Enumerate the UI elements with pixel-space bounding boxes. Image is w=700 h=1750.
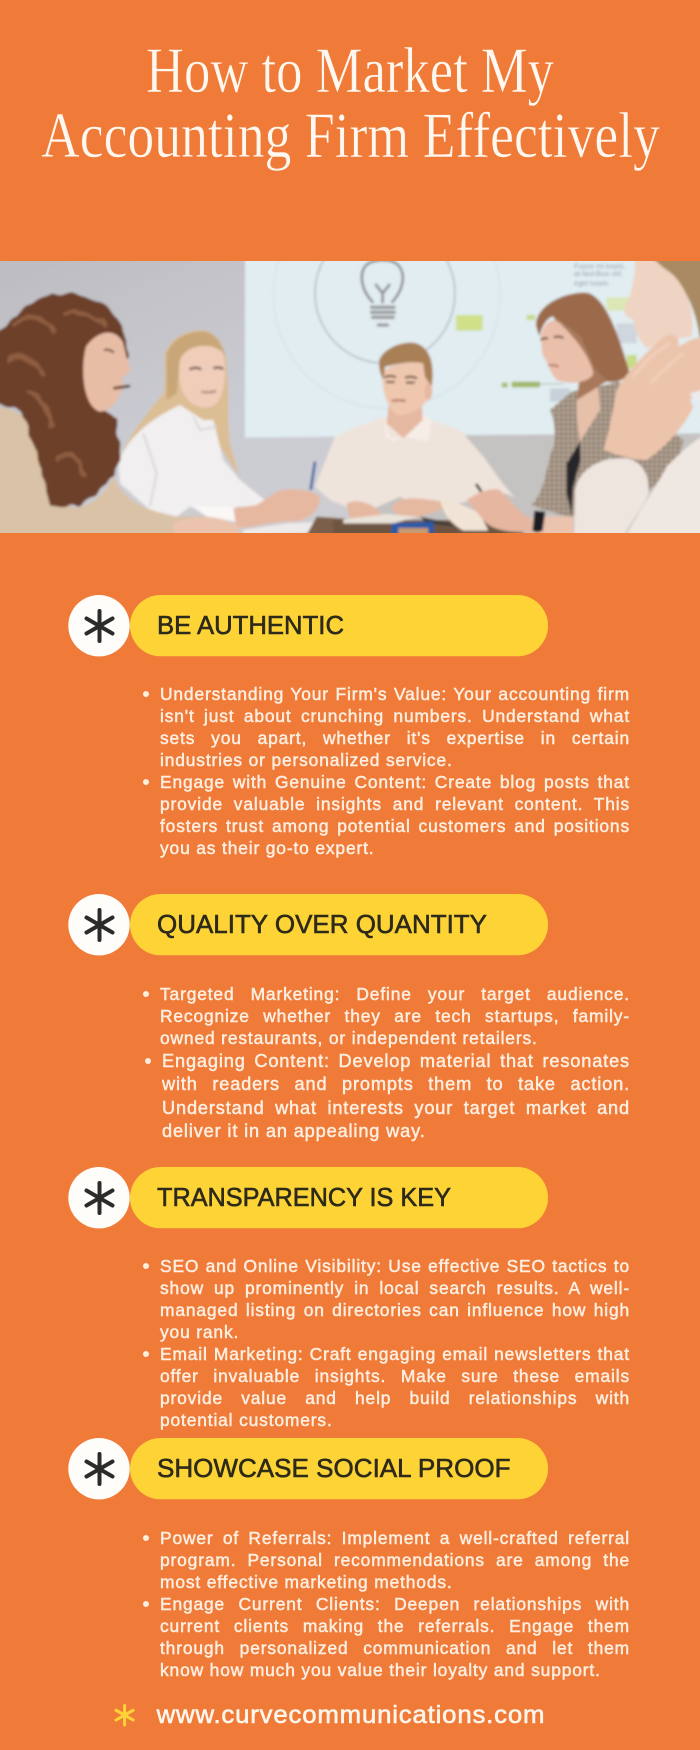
text block: bullets — [143, 1256, 630, 1430]
website url: www.curvecommunications.com — [156, 1701, 545, 1729]
text block: bullets: current clients making the referrals. Engage them — [160, 1616, 630, 1636]
text block: bullets: sets you apart, whether it's expertise in certain — [160, 728, 630, 748]
heading pill — [130, 1438, 548, 1500]
text block: bullets: most effective marketing methods. — [160, 1572, 453, 1592]
text block: second bullet, slightly larger: deliver it in an appealing way. — [162, 1121, 426, 1141]
photo: team meeting around a table in front of a projector screen — [0, 261, 700, 533]
text block: bullets: fosters trust among potential customers and positions — [160, 816, 630, 836]
text block: bullets: potential customers. — [160, 1410, 333, 1430]
text block: bullets: you as their go-to expert. — [160, 838, 374, 858]
text block: bullets: Engage Current Clients: Deepen relationships with — [160, 1594, 630, 1614]
text block: bullets: provide valuable insights and relevant content. This — [160, 794, 630, 814]
heading pill — [130, 1167, 548, 1228]
text block: second bullet, slightly larger: Engaging Content: Develop material that resonates — [162, 1051, 630, 1071]
text block: bullets: offer invaluable insights. Make sure these emails — [160, 1366, 630, 1386]
heading pill — [130, 595, 548, 656]
title — [41, 35, 660, 172]
icon: white circle with asterisk — [68, 595, 130, 656]
text block: bullets: Power of Referrals: Implement a well-crafted referral — [160, 1528, 630, 1548]
text block: bullets: managed listing on directories can influence how high — [160, 1300, 630, 1320]
text block: bullets: owned restaurants, or independent retailers. — [160, 1028, 538, 1048]
text block: bullets: you rank. — [160, 1322, 239, 1342]
panel: be authentic — [68, 595, 630, 858]
text block: bullets — [143, 684, 630, 858]
icon: white circle with asterisk — [68, 1167, 130, 1228]
text block: bullets: Understanding Your Firm's Value: Your accounting firm — [160, 684, 630, 704]
text block: bullets: provide value and help build relationships with — [160, 1388, 630, 1408]
icon: white circle with asterisk — [68, 1438, 130, 1500]
footer: website link with yellow asterisk — [114, 1701, 545, 1729]
photo: team meeting around a table in front of a projector screen: eget turpis — [574, 278, 609, 287]
panel: transparency is key — [68, 1167, 630, 1430]
text block: bullets — [143, 1528, 630, 1680]
text block: bullets — [143, 984, 630, 1048]
heading pill: QUALITY OVER QUANTITY — [157, 909, 487, 939]
text block: bullets: industries or personalized service. — [160, 750, 453, 770]
text block: bullets: through personalized communication and let them — [160, 1638, 630, 1658]
text block: bullets: isn't just about crunching numbers. Understand what — [160, 706, 630, 726]
text block: bullets: know how much you value their loyalty and support. — [160, 1660, 601, 1680]
text block: bullets: show up prominently in local search results. A well- — [160, 1278, 630, 1298]
heading pill: BE AUTHENTIC — [157, 609, 344, 639]
photo: team meeting around a table in front of a projector screen: at faucibus vel, — [574, 269, 623, 278]
icon: white circle with asterisk — [68, 894, 130, 956]
text block: bullets: SEO and Online Visibility: Use effective SEO tactics to — [160, 1256, 630, 1276]
panel: showcase social proof — [68, 1438, 630, 1680]
icon: yellow asterisk — [116, 1706, 133, 1725]
text block: second bullet, slightly larger: Understand what interests your target market and — [162, 1098, 630, 1118]
text block: bullets: Engage with Genuine Content: Create blog posts that — [160, 772, 630, 792]
heading pill — [130, 894, 548, 956]
text block: bullets: program. Personal recommendations are among the — [160, 1550, 630, 1570]
text block: bullets: Email Marketing: Craft engaging email newsletters that — [160, 1344, 630, 1364]
panel: quality over quantity — [68, 894, 630, 1142]
text block: bullets: Targeted Marketing: Define your target audience. — [160, 984, 630, 1004]
text block: bullets: Recognize whether they are tech startups, family- — [160, 1006, 630, 1026]
text block: second bullet, slightly larger — [145, 1051, 630, 1142]
title: How to Market My — [146, 35, 554, 107]
heading pill: TRANSPARENCY IS KEY — [157, 1181, 451, 1211]
photo: team meeting around a table in front of a projector screen: Fusce mi turpis, — [574, 261, 626, 270]
heading pill: SHOWCASE SOCIAL PROOF — [157, 1453, 510, 1483]
text block: second bullet, slightly larger: with readers and prompts them to take action. — [162, 1074, 630, 1094]
